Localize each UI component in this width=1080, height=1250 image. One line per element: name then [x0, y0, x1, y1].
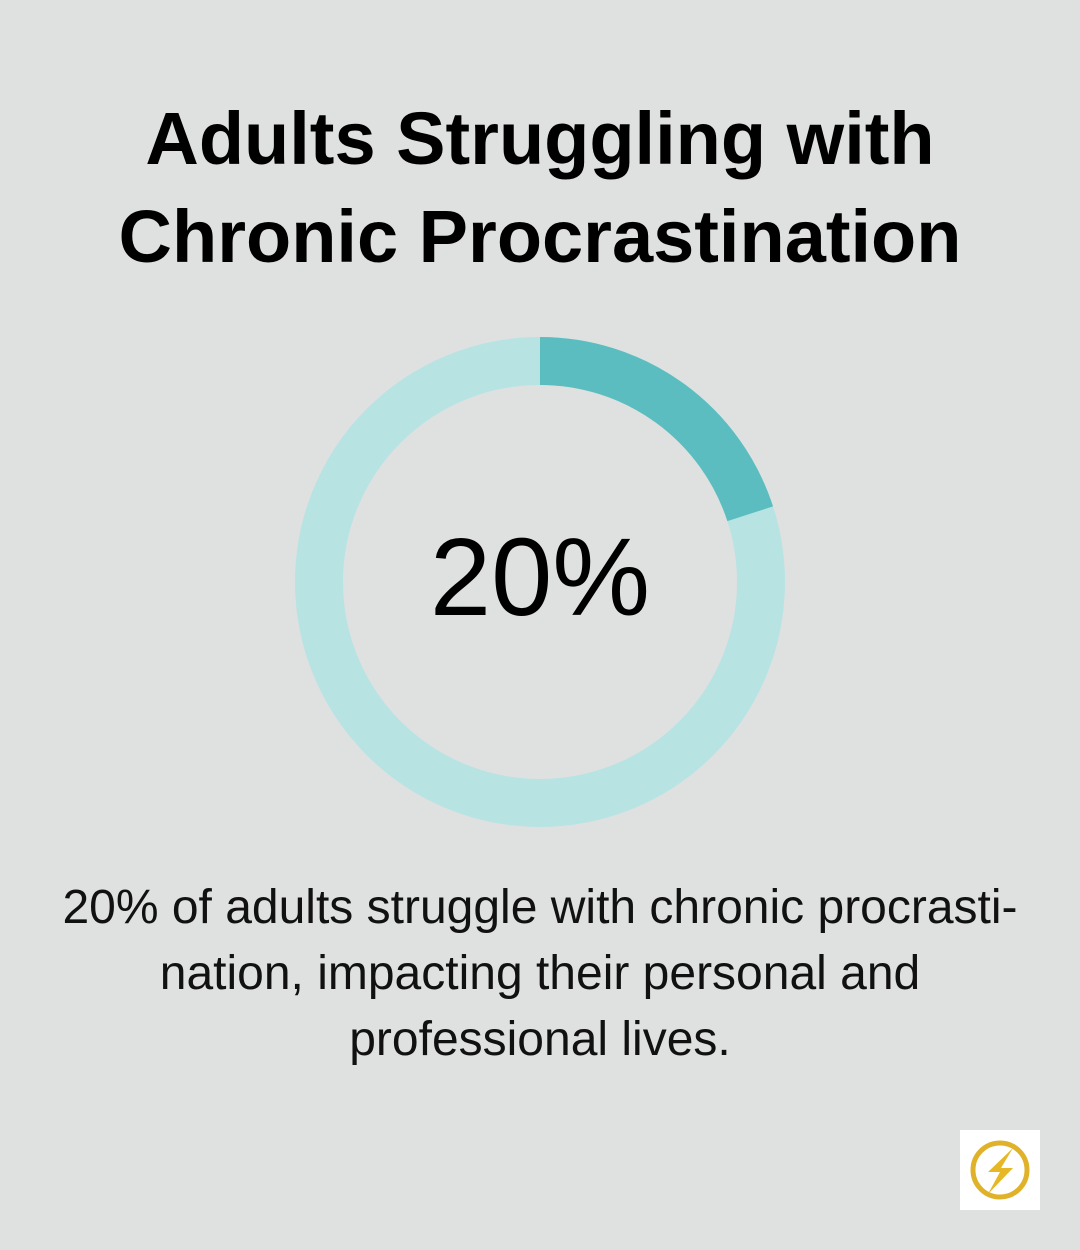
description: nation, impacting their personal and — [160, 947, 920, 1000]
title: Adults Struggling with — [145, 97, 935, 180]
title — [119, 97, 961, 278]
description: professional lives. — [349, 1013, 731, 1066]
description — [62, 881, 1018, 1066]
title: Chronic Procrastination — [119, 195, 961, 278]
icon: logo — [960, 1130, 1040, 1210]
donut chart: 20% — [430, 516, 650, 639]
description: 20% of adults struggle with chronic procrasti- — [62, 881, 1018, 934]
